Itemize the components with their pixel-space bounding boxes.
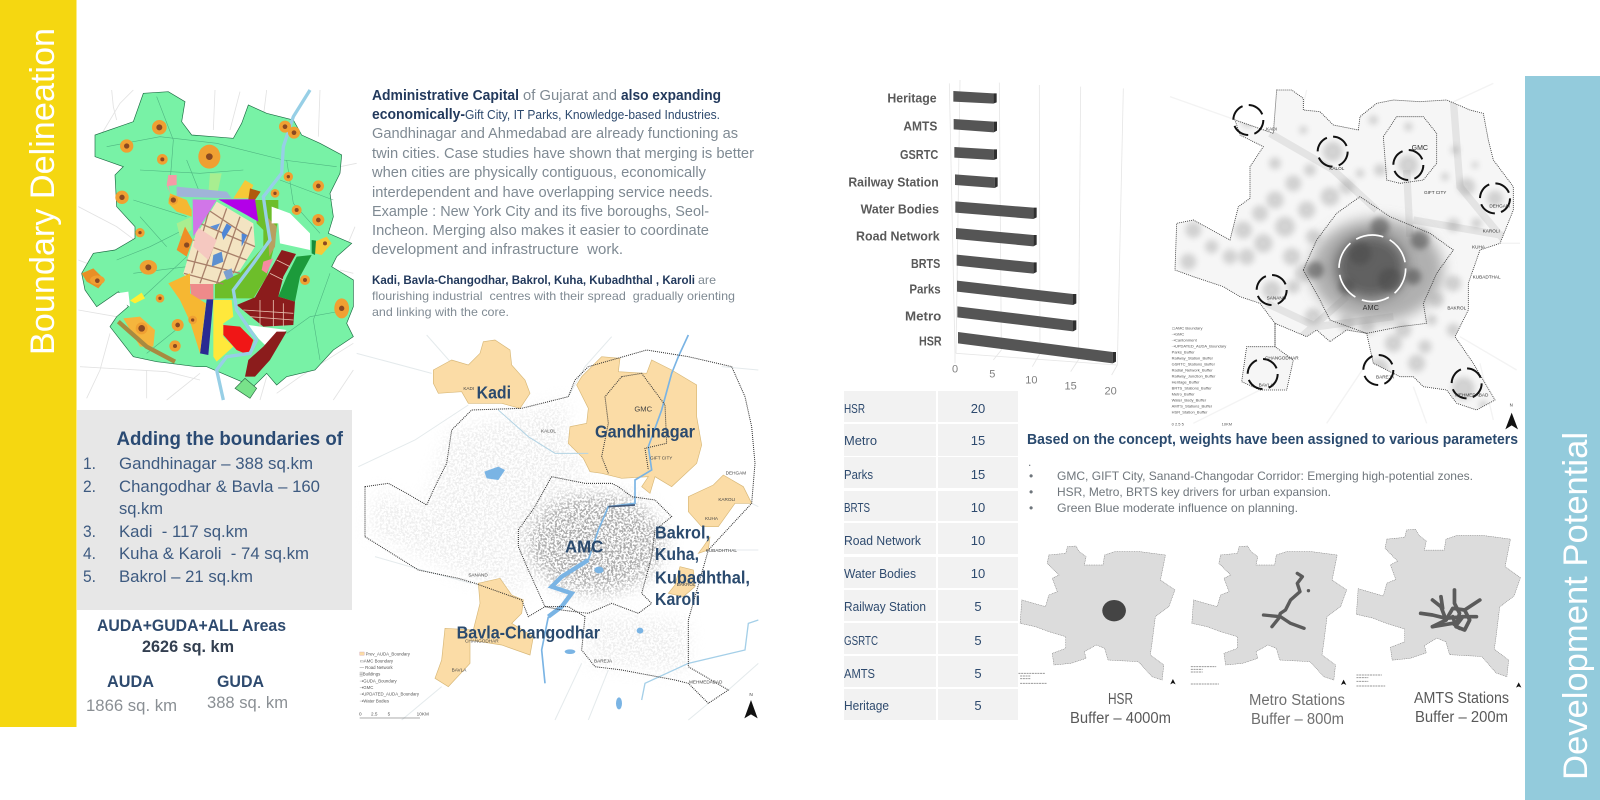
row: GSRTC: GSRTC <box>844 633 878 648</box>
text block: key findings bullets: GMC, GIFT City, Sanand-Changodar Corridor: Emerging high-potential zones. <box>1057 469 1473 483</box>
map place labels: KALOL <box>1329 166 1345 171</box>
area label: AMC: AMC <box>565 537 603 557</box>
village settlement blobs <box>90 120 349 352</box>
red commercial area <box>223 325 253 355</box>
bar: AMTS: AMTS <box>903 119 938 134</box>
icon: north arrow <box>1505 403 1518 429</box>
list item 1: Gandhinagar – 388 sq.km <box>119 454 313 473</box>
heat map legend: Metro_Buffer <box>1172 391 1195 396</box>
AMC boundary <box>518 477 672 613</box>
caption: Metro stations buffer: Metro Stations <box>1249 692 1345 709</box>
heat map legend <box>1172 325 1232 427</box>
scale bar: 5 <box>388 712 391 717</box>
heat map legend: BRTS_Stations_Buffer <box>1172 385 1212 390</box>
map legend <box>360 652 420 703</box>
small map: AMTS stations buffer <box>1356 529 1521 688</box>
heat map legend: Radial_Network_Buffer <box>1172 367 1213 372</box>
stat: GUDA area <box>207 673 288 712</box>
row: Parks: 15 <box>971 467 985 482</box>
area label: Bakrol Kuha Kubadhthal Karoli: Karoli <box>655 589 700 609</box>
text block: administrative capital rationale: interdependent and have overlapping service needs. <box>372 185 713 201</box>
metro station corridors <box>1264 573 1304 628</box>
map place labels: GIFT CITY <box>1424 190 1446 195</box>
axis values: 5 <box>989 369 995 381</box>
dense AMC built-up area <box>527 493 663 593</box>
map place labels: DEHGAM <box>1489 203 1510 208</box>
row: Railway Station: 5 <box>974 599 982 614</box>
row: Heritage: 5 <box>974 698 982 713</box>
caption: HSR buffer: HSR <box>1108 691 1133 708</box>
map place labels: KUBADTHAL <box>1473 275 1501 280</box>
dotted AUDA boundary <box>1175 90 1513 410</box>
heat map legend: Railway_Junction_Buffer <box>1172 373 1216 378</box>
list item 3: Kadi - 117 sq.km <box>119 522 248 541</box>
row: AMTS <box>844 656 1018 687</box>
list item 5: Bakrol – 21 sq.km <box>119 567 253 586</box>
bar: GSRTC <box>900 147 997 162</box>
bar: Road Network: Road Network <box>856 229 940 244</box>
row: BRTS <box>844 491 1018 521</box>
map legend: ⇢GMC <box>360 685 373 690</box>
highlight: AMC core ring <box>1339 235 1406 302</box>
axis values: 0 <box>952 364 958 376</box>
bar: Heritage: Heritage <box>887 90 937 105</box>
row: Parks <box>844 457 1018 488</box>
map place labels: AMC <box>1363 303 1380 312</box>
dark green zone <box>278 255 312 302</box>
AMC high potential core <box>1310 218 1443 322</box>
row: AMTS: 5 <box>974 666 982 681</box>
sidebar title: Development Potential: Development Potential <box>1557 432 1595 780</box>
text block: administrative capital rationale: Gift City, IT Parks, Knowledge-based Industries. <box>465 108 720 122</box>
map legend: — Road Network <box>360 665 393 670</box>
text block: administrative capital rationale: Example : New York City and its five boroughs, Seol- <box>372 204 709 220</box>
added area: Bakrol <box>668 567 695 597</box>
map legend: ⇢GUDA_Boundary <box>360 678 398 683</box>
bar: Water Bodies <box>861 201 1037 219</box>
bar: Water Bodies: Water Bodies <box>861 202 939 217</box>
small place labels: AMC <box>582 548 595 554</box>
text block: industrial centres: flourishing industrial centres with their spread gradually orienting <box>372 289 735 303</box>
row: HSR: HSR <box>844 401 865 416</box>
row: Metro: 15 <box>971 433 985 448</box>
map place labels: BAVLA <box>1259 383 1274 388</box>
text block: industrial centres: and linking with the core. <box>372 305 509 319</box>
table: parameter weights <box>844 391 1018 720</box>
small map: Metro stations buffer <box>1191 546 1347 685</box>
bar: Metro <box>905 306 1076 331</box>
stat: GUDA area: GUDA <box>217 673 264 691</box>
central green belt <box>215 200 278 298</box>
3D bar chart: parameter weights <box>848 80 1123 398</box>
panel: boundaries added list <box>77 410 352 610</box>
text block: industrial centres: Kadi, Bavla-Changodhar, Bakrol, Kuha, Kubadhthal , Karoli <box>372 273 695 287</box>
text block: administrative capital rationale: Administrative Capital <box>372 88 519 104</box>
area label: Kadi: Kadi <box>477 382 511 402</box>
icon: north arrow <box>1516 682 1521 688</box>
row: Metro: Metro <box>844 433 877 448</box>
regional road network <box>357 335 758 720</box>
text block: administrative capital rationale: economically- <box>372 107 465 123</box>
list item 2 <box>83 477 320 518</box>
text block: key findings bullets: • <box>1029 485 1033 499</box>
bar: BRTS: BRTS <box>911 256 941 271</box>
text block: administrative capital rationale: Incheon. Merging also makes it easier to coordinate <box>372 223 709 239</box>
area label: Bakrol Kuha Kubadhthal Karoli: Kuha, <box>655 544 699 564</box>
bar: Railway Station: Railway Station <box>848 175 939 190</box>
small place labels: KUBADHTHAL <box>706 548 737 553</box>
small place labels: SANAND <box>468 573 488 578</box>
map place labels: SANAND <box>1267 295 1287 300</box>
heat map legend: GSRTC_Stations_Buffer <box>1172 361 1216 366</box>
list item 2: sq.km <box>119 499 163 518</box>
map place labels: BAREJA <box>1376 374 1395 379</box>
map place labels: KAROLI <box>1483 228 1500 233</box>
caption: Metro stations buffer <box>1249 692 1345 728</box>
HSR buffer circle <box>1102 600 1126 621</box>
list item 2: 2. <box>83 477 96 496</box>
mini legend <box>1018 673 1047 683</box>
map: land use development plan <box>78 90 357 400</box>
heading: adding the boundaries: Adding the boundaries of <box>116 429 344 450</box>
AUDA dotted boundary <box>365 350 755 703</box>
yellow and orange residential <box>213 300 233 362</box>
small place labels: GIFT CITY <box>650 455 672 460</box>
text block: administrative capital rationale: development and infrastructure work. <box>372 242 623 258</box>
total area callout: 2626 sq. km <box>142 638 234 656</box>
row: Road Network: 10 <box>971 533 985 548</box>
text block: key findings bullets: HSR, Metro, BRTS key drivers for urban expansion. <box>1057 485 1331 499</box>
bar: HSR <box>919 332 1116 363</box>
water bodies <box>498 335 758 700</box>
heat map legend: ▭AMC Boundary <box>1172 325 1202 330</box>
map place labels: MEHMEDABAD <box>1455 393 1489 398</box>
area label: Bakrol Kuha Kubadhthal Karoli <box>655 522 750 609</box>
axis values: 10 <box>1025 374 1037 386</box>
bar: Parks <box>909 281 1076 305</box>
axis values: 15 <box>1065 380 1077 392</box>
text block: industrial centres <box>372 273 735 319</box>
row: HSR <box>844 391 1018 422</box>
mini legend <box>1191 667 1219 684</box>
axis values <box>952 364 1117 398</box>
faint regional roads <box>1170 83 1520 423</box>
heat map legend: HSR_Station_Buffer <box>1172 409 1208 414</box>
bar: Railway Station <box>848 174 998 190</box>
text block: administrative capital rationale: when cities are physically contiguous, economically <box>371 165 707 181</box>
row: Water Bodies <box>844 557 1018 588</box>
row: Water Bodies: 10 <box>971 566 985 581</box>
area label: Bavla-Changodhar: Bavla-Changodhar <box>457 622 600 642</box>
map: development potential heat map <box>1160 70 1527 437</box>
heat map legend: Heritage_Buffer <box>1172 379 1200 384</box>
area label: Bakrol Kuha Kubadhthal Karoli: Kubadhthal, <box>655 567 750 587</box>
heat map legend: Parks_Buffer <box>1172 349 1195 354</box>
text block: industrial centres: are <box>698 273 716 287</box>
heading: weights concept: Based on the concept, weights have been assigned to various parameters <box>1027 432 1518 448</box>
total area callout: AUDA+GUDA+ALL Areas <box>97 617 286 635</box>
row: Metro <box>844 424 1018 456</box>
scale bar <box>359 712 429 718</box>
bar: Metro: Metro <box>905 308 941 323</box>
small map: HSR buffer <box>1018 546 1176 684</box>
row: Water Bodies: Water Bodies <box>844 566 916 581</box>
map legend: Prev_AUDA_Boundary <box>366 652 411 657</box>
map place labels: KADI <box>1266 127 1277 132</box>
row: Heritage: Heritage <box>844 698 889 713</box>
icon: north arrow <box>744 692 758 718</box>
small place labels: CHANGODHAR <box>465 639 499 644</box>
added area: Gandhinagar <box>568 357 702 493</box>
map legend: ⇢Water Bodies <box>360 698 389 703</box>
map legend: ▭AMC Boundary <box>360 658 394 663</box>
AMC and GMC boundaries <box>1303 197 1453 333</box>
added area: Bavla-Changodhar <box>435 578 533 687</box>
small place labels: KAROLI <box>718 497 735 502</box>
map place labels: GMC <box>1412 145 1428 152</box>
map place labels: BAKROL <box>1447 305 1467 310</box>
map: expanded boundary with added areas <box>357 335 758 720</box>
river <box>217 90 310 400</box>
row: HSR: 20 <box>971 401 985 416</box>
small place labels: MEHMEDABAD <box>689 679 723 684</box>
text block: key findings bullets: • <box>1029 469 1033 483</box>
heat map legend: 0 2.5 5 <box>1172 422 1185 427</box>
list item 4: Kuha & Karoli - 74 sq.km <box>119 544 309 563</box>
bar: Parks: Parks <box>909 282 941 297</box>
stat: GUDA area: 388 sq. km <box>207 694 288 712</box>
heat map legend: ⇢UPDATED_AUDA_Boundary <box>1172 343 1226 348</box>
purple institutional zones <box>193 199 217 237</box>
heat map legend: ⇢GMC <box>1172 331 1184 336</box>
stat: AUDA area: 1866 sq. km <box>86 697 177 715</box>
text block: administrative capital rationale: also expanding <box>621 88 721 104</box>
icon: north arrow: N <box>1510 403 1513 408</box>
caption: Metro stations buffer: Buffer – 800m <box>1251 711 1344 728</box>
text block: key findings bullets: . <box>1028 455 1031 469</box>
bar: BRTS <box>911 255 1037 274</box>
bar: Road Network <box>856 228 1037 246</box>
scale bar: 10KM <box>417 712 429 717</box>
map place labels <box>1259 127 1510 398</box>
small place labels <box>452 386 746 684</box>
text block: key findings bullets: Green Blue moderate influence on planning. <box>1057 501 1298 515</box>
row: Railway Station <box>844 590 1018 621</box>
icon: north arrow <box>1341 680 1346 685</box>
icon: north arrow: N <box>749 692 753 697</box>
heat map legend: 10KM <box>1222 422 1232 427</box>
total area callout <box>97 617 286 656</box>
stat: AUDA area <box>86 673 177 715</box>
stat: AUDA area: AUDA <box>107 673 154 691</box>
list item 4: 4. <box>83 544 96 563</box>
GMC boundary <box>622 373 667 470</box>
small place labels: DEHGAM <box>726 470 746 475</box>
small place labels: KADI <box>463 386 474 391</box>
scale bar: 2.5 <box>371 712 378 717</box>
area label: Bakrol Kuha Kubadhthal Karoli: Bakrol, <box>655 522 710 542</box>
panel: development potential sidebar <box>1525 76 1600 800</box>
area label: Gandhinagar: Gandhinagar <box>595 421 695 441</box>
caption: AMTS stations buffer: AMTS Stations <box>1414 690 1509 707</box>
bar: HSR: HSR <box>919 334 942 349</box>
heat map legend: Railway_Station_Buffer <box>1172 355 1214 360</box>
buffer blobs <box>1180 113 1503 409</box>
map legend: ⇢UPDATED_AUDA_Boundary <box>360 692 420 697</box>
heat map legend: AMTS_Stations_Buffer <box>1172 403 1213 408</box>
light green and yellow patches <box>208 173 222 197</box>
small place labels: GMC <box>634 405 653 414</box>
row: GSRTC <box>844 623 1018 654</box>
small place labels: BAVLA <box>452 668 467 673</box>
icon: north arrow <box>1170 679 1176 684</box>
text block: key findings bullets: • <box>1029 501 1033 515</box>
text block: administrative capital rationale <box>371 88 754 258</box>
bar: Heritage <box>887 90 997 105</box>
map legend: ▒Buildings <box>360 672 380 677</box>
scale bar: 0 <box>359 712 362 717</box>
sidebar title: Boundary Delineation: Boundary Delineation <box>24 28 62 355</box>
added area: Karoli and Kuha <box>688 475 752 527</box>
heat map legend: Water_Body_Buffer <box>1172 397 1207 402</box>
row: Railway Station: Railway Station <box>844 599 926 614</box>
caption: HSR buffer <box>1070 691 1171 727</box>
row: AMTS: AMTS <box>844 666 875 681</box>
list item 3: 3. <box>83 522 96 541</box>
text block: administrative capital rationale: Gandhinagar and Ahmedabad are already functioning as <box>372 126 738 142</box>
bar: AMTS <box>903 119 997 134</box>
AMTS route network <box>1421 590 1480 630</box>
caption: AMTS stations buffer: Buffer – 200m <box>1415 709 1508 726</box>
list item 5: 5. <box>83 567 96 586</box>
suburban building speckle <box>368 400 588 597</box>
heat map legend: ⇢Cantonment <box>1172 337 1198 342</box>
highlight: growth centre rings <box>1233 105 1510 398</box>
small place labels: BAKROL <box>677 582 696 587</box>
row: BRTS: BRTS <box>844 500 870 515</box>
dark red industrial blocks <box>237 250 296 327</box>
caption: HSR buffer: Buffer – 4000m <box>1070 710 1171 727</box>
text block: administrative capital rationale: twin cities. Case studies have shown that merging is better <box>372 146 754 162</box>
green peripheral zone <box>82 92 353 387</box>
map place labels: CHANGODHAR <box>1265 355 1299 360</box>
gridded core sector <box>183 202 255 284</box>
map place labels: KUHA <box>1472 245 1486 250</box>
text block: key findings bullets <box>1028 455 1473 515</box>
row: Heritage <box>844 689 1018 720</box>
panel: boundary delineation sidebar <box>0 0 76 727</box>
bar: GSRTC: GSRTC <box>900 147 939 162</box>
list item 1: 1. <box>83 454 96 473</box>
row: Road Network <box>844 523 1018 554</box>
white reserved area <box>272 207 310 250</box>
added area: Kubadhthal <box>698 537 710 553</box>
axis values: 20 <box>1105 386 1117 398</box>
small place labels: BAREJA <box>594 659 613 664</box>
prev AUDA additions: Kadi <box>433 340 530 408</box>
caption: AMTS stations buffer <box>1414 690 1509 726</box>
row: Parks: Parks <box>844 467 873 482</box>
row: GSRTC: 5 <box>974 633 982 648</box>
text block: administrative capital rationale: of Gujarat and <box>523 88 617 104</box>
list item 2: Changodhar & Bavla – 160 <box>119 477 320 496</box>
small place labels: KUHA <box>705 516 719 521</box>
pink and navy sectors <box>190 284 213 299</box>
mini legend <box>1356 675 1385 686</box>
row: Road Network: Road Network <box>844 533 921 548</box>
row: BRTS: 10 <box>971 500 985 515</box>
small place labels: KALOL <box>541 429 556 434</box>
